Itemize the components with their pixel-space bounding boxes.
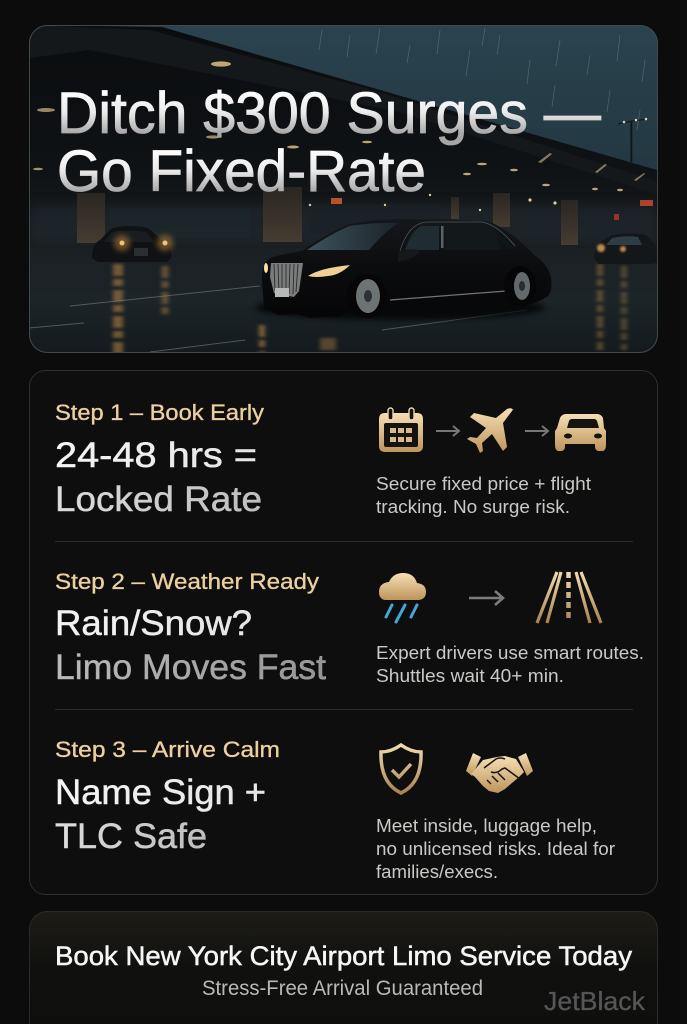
step 1 description: Secure fixed price + flight	[376, 473, 591, 494]
step 1 description	[376, 473, 591, 517]
icon: road	[537, 572, 601, 623]
distant car right	[594, 234, 658, 264]
step 3 headline: Name Sign +	[55, 773, 266, 812]
exit signs	[331, 198, 342, 204]
wet ground	[29, 248, 658, 353]
call to action heading: Book New York City Airport Limo Service Today	[55, 941, 633, 971]
step 2 headline	[55, 604, 326, 687]
wheels	[356, 279, 380, 318]
columns	[77, 187, 578, 245]
step 2 description: Expert drivers use smart routes.	[376, 642, 644, 663]
panel: hero photo	[29, 25, 658, 354]
airport roof	[29, 25, 658, 260]
title: Ditch $300 Surges —	[57, 81, 601, 146]
windows	[307, 223, 399, 250]
title: Go Fixed-Rate	[57, 139, 426, 204]
title	[57, 81, 601, 204]
reflections	[118, 264, 624, 354]
step 1 headline: Locked Rate	[55, 480, 262, 519]
panel: three steps	[30, 370, 658, 894]
step 2 description	[376, 642, 644, 686]
step 1 heading: Step 1 – Book Early	[55, 400, 265, 425]
icon: car	[555, 414, 606, 451]
step 3 headline: TLC Safe	[55, 817, 207, 856]
step 3 description: Meet inside, luggage help,	[376, 815, 597, 836]
step 3 headline	[55, 773, 266, 856]
distant car left	[92, 226, 173, 262]
rain	[319, 28, 645, 130]
call to action subheading: Stress-Free Arrival Guaranteed	[202, 977, 483, 1000]
arrow	[525, 426, 548, 436]
step 3 description: families/execs.	[376, 861, 498, 882]
icon: shield	[381, 745, 421, 793]
hero border	[30, 26, 658, 352]
step 1 headline	[55, 436, 262, 519]
terminal glow	[29, 205, 658, 245]
step 2 headline: Rain/Snow?	[55, 604, 252, 643]
icon: airplane	[467, 408, 514, 453]
step 1 description: tracking. No surge risk.	[376, 496, 570, 517]
headlights	[308, 265, 350, 277]
logo: JetBlack: JetBlack	[544, 986, 646, 1016]
step 2 headline: Limo Moves Fast	[55, 648, 326, 687]
step 3 heading: Step 3 – Arrive Calm	[55, 737, 280, 762]
icon: rain cloud	[379, 573, 426, 622]
parking lines	[29, 286, 527, 352]
panel: call to action	[30, 912, 658, 1024]
step 1 headline: 24-48 hrs =	[55, 436, 257, 475]
lamp post	[618, 118, 648, 162]
ceiling lights	[33, 61, 645, 211]
step 2 description: Shuttles wait 40+ min.	[376, 665, 564, 686]
grille	[270, 263, 303, 297]
step 3 description: no unlicensed risks. Ideal for	[376, 838, 615, 859]
arrow	[436, 426, 459, 436]
icon: calendar	[379, 408, 423, 452]
limousine	[255, 219, 552, 320]
step 3 description	[376, 815, 615, 882]
icon: handshake	[466, 753, 533, 793]
arrow	[469, 591, 503, 605]
step 2 heading: Step 2 – Weather Ready	[55, 569, 320, 594]
